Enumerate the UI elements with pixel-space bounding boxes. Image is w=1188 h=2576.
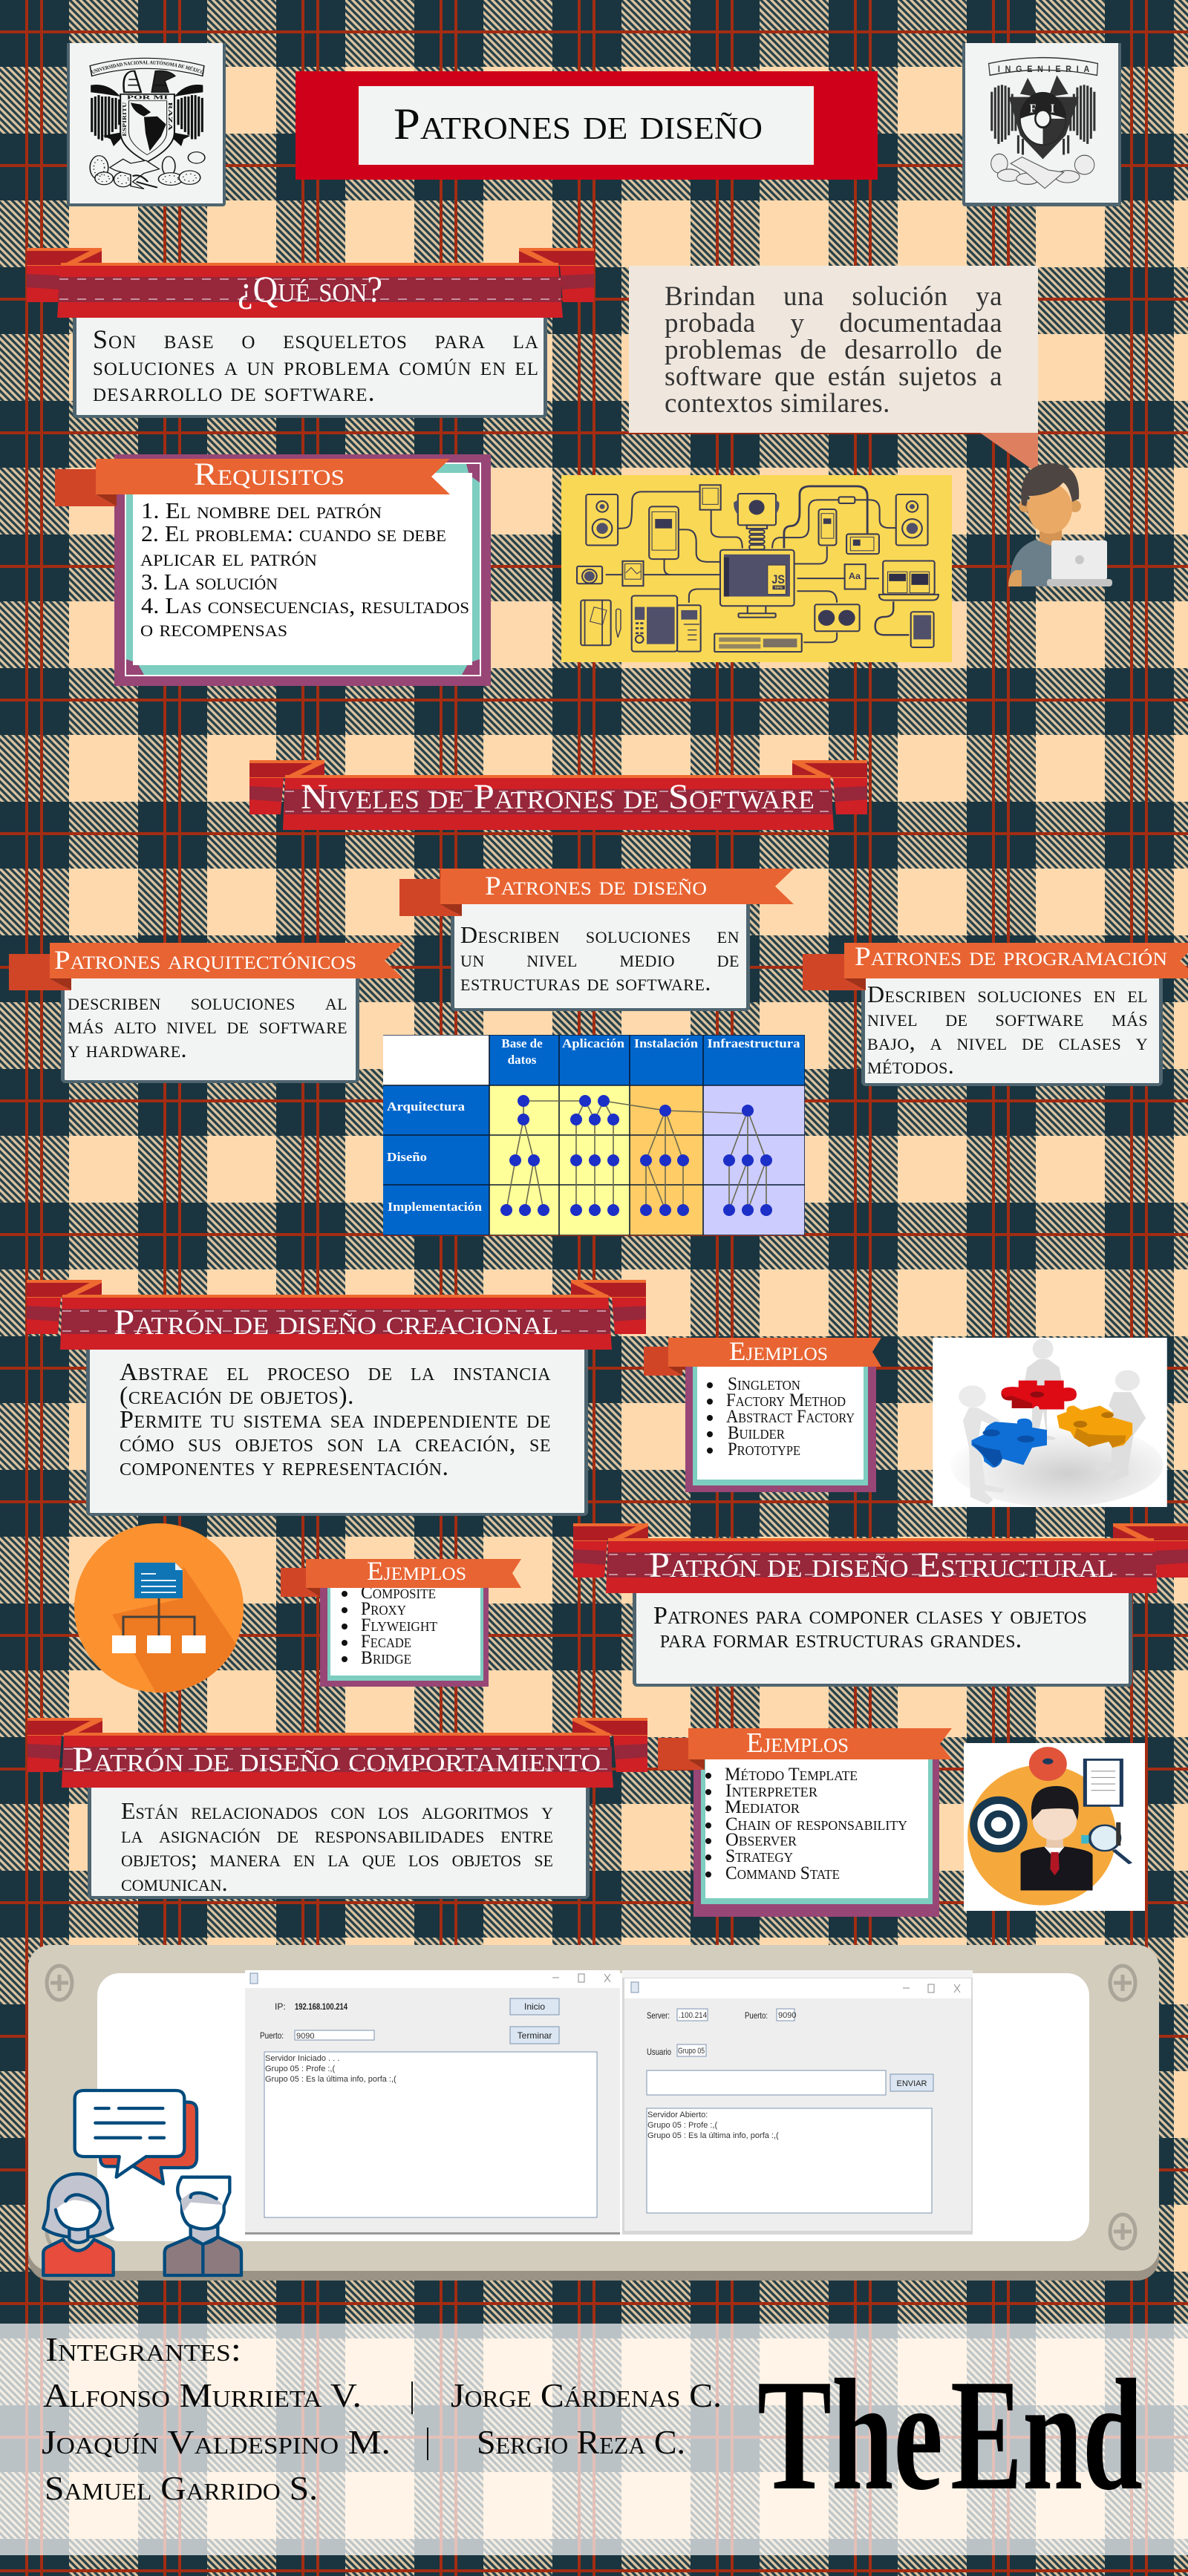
list: ejemplos estructurales: Fecade — [361, 1632, 411, 1652]
icon: orange circle with document hierarchy — [74, 1523, 244, 1693]
icon: person with laptop — [1008, 463, 1112, 586]
text: soluciones: contextos similares. — [665, 388, 890, 419]
table headers: Base de — [501, 1036, 543, 1050]
table: niveles por base de datos, aplicación, instalación, infraestructura — [383, 1035, 805, 1235]
screenshot: client window: Grupo 05 : Profe :,( — [647, 2121, 717, 2130]
table headers: datos — [508, 1053, 537, 1067]
image: Ingeniería logo card: I — [1051, 102, 1054, 116]
image: yellow connected devices illustration: TIPS — [774, 586, 782, 590]
text: soluciones — [665, 281, 1002, 419]
panel: patrones de programación — [861, 972, 1163, 1086]
list: ejemplos comportamiento — [705, 1765, 907, 1883]
list: ejemplos creacionales — [707, 1374, 855, 1459]
text: descripción comportamiento: comunican. — [121, 1869, 228, 1896]
panel: ejemplos creacional — [685, 1362, 876, 1492]
footer text: integrantes: Sergio Reza C. — [477, 2423, 685, 2461]
list text: requisitos — [140, 497, 469, 641]
image: Ingeniería logo card — [962, 43, 1121, 206]
title banner — [296, 71, 878, 180]
ribbon heading: niveles: Niveles de Patrones de Software — [301, 777, 815, 817]
image: UNAM logo card: UNIVERSIDAD NACIONAL AUTÓNOMA DE MÉXICO — [91, 60, 203, 74]
text: descripción estructural — [653, 1604, 1087, 1651]
image: UNAM logo card: ESPIRITU — [122, 102, 128, 137]
screenshot: server window: Grupo 05 : Es la última info, porfa :,( — [265, 2075, 396, 2084]
text: descripción programación — [867, 982, 1148, 1077]
panel: patrones de diseño — [451, 898, 750, 1011]
text: soluciones: Brindan una solución ya — [665, 281, 1002, 312]
footer text: integrantes: Joaquín Valdespino M. — [42, 2423, 391, 2461]
screenshot: client window: 9090 — [778, 2011, 796, 2020]
panel: requisitos — [114, 454, 491, 686]
table headers: Infraestructura — [707, 1036, 800, 1050]
list: ejemplos estructurales: Flyweight — [361, 1615, 437, 1635]
list: ejemplos estructurales: Composite — [361, 1583, 436, 1603]
ribbon heading: patrón creacional: Patrón de diseño creacional — [114, 1303, 558, 1342]
title plate — [359, 86, 814, 165]
ribbon: ejemplos comportamiento — [658, 1728, 952, 1770]
list text: requisitos: 1. El nombre del patrón — [141, 497, 382, 523]
footer text: integrantes: Samuel Garrido S. — [45, 2469, 318, 2507]
text: soluciones: problemas de desarrollo de — [665, 335, 1002, 365]
footer text: integrantes: Integrantes: — [45, 2330, 241, 2368]
ribbon heading: patrón comportamiento: Patrón de diseño comportamiento — [72, 1740, 601, 1779]
list text: requisitos: 3. La solución — [141, 569, 278, 595]
screenshot: server window: Puerto: — [260, 2030, 284, 2041]
screenshot: client window: Servidor Abierto: — [647, 2111, 708, 2119]
panel: ejemplos estructural — [320, 1583, 489, 1687]
text: descripción arquitectónicos: y hardware. — [68, 1036, 187, 1062]
table row labels: Diseño — [387, 1150, 427, 1164]
text: descripción diseño: estructuras de software. — [460, 969, 711, 996]
table row labels: Implementación — [388, 1200, 483, 1214]
screenshot: client window: Puerto: — [745, 2010, 768, 2021]
text: descripción arquitectónicos: más alto nivel de software — [68, 1012, 347, 1039]
panel: ejemplos comportamiento — [693, 1753, 939, 1917]
table headers — [501, 1036, 800, 1067]
panel: patrón creacional — [86, 1344, 588, 1516]
ribbon: ejemplos creacional — [644, 1338, 881, 1376]
image: yellow connected devices illustration: Aa — [848, 571, 861, 581]
ribbon: ejemplos estructural — [281, 1559, 521, 1597]
screenshot: server window: Terminar — [518, 2030, 552, 2041]
list: ejemplos comportamiento: Mediator — [725, 1797, 800, 1817]
screenshot: server window: Servidor Iniciado . . . — [265, 2054, 339, 2063]
image: businessman with target and clipboard — [964, 1743, 1145, 1911]
ribbon: ejemplos comportamiento: Ejemplos — [746, 1728, 849, 1759]
list text: requisitos: o recompensas — [140, 615, 287, 641]
screenshot: client window — [622, 1970, 973, 2235]
list: ejemplos estructurales: Bridge — [361, 1648, 411, 1668]
footer text: integrantes: Alfonso Murrieta V. — [43, 2376, 362, 2414]
list: ejemplos estructurales: Proxy — [361, 1599, 406, 1619]
text: descripción arquitectónicos: describen soluciones al — [68, 988, 347, 1015]
hierarchy node diagram — [500, 1095, 772, 1216]
board face — [28, 1945, 1159, 2271]
list: ejemplos creacionales: Factory Method — [726, 1390, 846, 1410]
screenshot: server window: Grupo 05 : Profe :,( — [265, 2065, 335, 2073]
text: descripción diseño: Describen soluciones en — [460, 921, 740, 948]
text: descripción arquitectónicos — [68, 990, 347, 1061]
ribbon: patrones de diseño — [399, 869, 794, 916]
ribbon heading: ¿Qué son?: ¿Qué son? — [238, 268, 382, 310]
list: ejemplos estructurales — [342, 1583, 437, 1668]
image: UNAM logo card: RAZA — [167, 102, 173, 131]
text: descripción comportamiento: objetos; manera en la que los objetos se — [121, 1845, 553, 1871]
screenshot: server window: 9090 — [296, 2032, 314, 2041]
ribbon heading: patrón comportamiento — [27, 1718, 647, 1788]
list text: requisitos: 2. El problema: cuando se debe — [141, 520, 446, 546]
text: descripción comportamiento — [121, 1799, 553, 1895]
text: soluciones: probada y documentadaa — [665, 308, 1002, 339]
panel: patrones arquitectónicos — [61, 972, 359, 1083]
list: ejemplos comportamiento: Interpreter — [725, 1781, 817, 1801]
text: definición: desarrollo de software. — [93, 377, 376, 407]
image: yellow connected devices illustration — [561, 475, 952, 662]
table headers: Instalación — [634, 1036, 699, 1050]
image: yellow connected devices illustration: JS — [771, 573, 784, 586]
panel: patrón estructural — [633, 1589, 1132, 1687]
screenshot: client window: .100.214 — [679, 2011, 707, 2020]
screenshot: client window: Grupo 05 — [678, 2047, 705, 2056]
screenshot: server window: 192.168.100.214 — [295, 2001, 347, 2012]
ribbon: requisitos — [55, 459, 450, 506]
ribbon heading: patrón creacional — [27, 1280, 646, 1350]
speech bubble: text callout — [629, 266, 1038, 469]
text: descripción creacional: Abstrae el proceso de la instancia Permite tu sistema sea independiente de — [120, 1359, 551, 1434]
footer text: integrantes — [0, 2324, 742, 2555]
table headers: Aplicación — [562, 1036, 625, 1050]
screenshot: server window: Inicio — [524, 2001, 545, 2012]
screenshot: server window: IP: — [275, 2001, 286, 2012]
text: descripción comportamiento: Están relacionados con los algoritmos y — [121, 1797, 553, 1824]
text: descripción comportamiento: la asignación de responsabilidades entre — [121, 1821, 553, 1848]
list: ejemplos creacionales: Prototype — [728, 1439, 800, 1459]
text: descripción diseño — [460, 923, 740, 994]
ribbon heading: ¿Qué son? — [27, 248, 594, 318]
ribbon: patrones arquitectónicos: Patrones arquitectónicos — [54, 945, 356, 975]
image: 3D figures with puzzle pieces — [933, 1338, 1167, 1507]
image: UNAM logo card — [67, 43, 226, 206]
text: descripción creacional — [120, 1361, 551, 1480]
panel: patrón comportamiento — [88, 1782, 590, 1899]
text: definición: soluciones a un problema común en el — [93, 350, 539, 380]
image: Ingeniería logo card: INGENIERIA — [998, 65, 1090, 74]
list: ejemplos comportamiento: Command State — [725, 1863, 840, 1883]
text: descripción programación: bajo, a nivel de clases y — [867, 1028, 1148, 1055]
screenshot: client window: Usuario — [647, 2047, 671, 2057]
ribbon: patrones de programación — [803, 943, 1188, 990]
list: ejemplos comportamiento: Observer — [725, 1830, 797, 1850]
text: descripción diseño: un nivel medio de — [460, 945, 740, 972]
footer text: integrantes: Jorge Cárdenas C. — [451, 2376, 722, 2414]
text: definición — [93, 324, 539, 407]
footer text: The End — [750, 2368, 1151, 2502]
table row labels — [387, 1099, 483, 1214]
text: descripción creacional: cómo sus objetos son la creación, se — [120, 1430, 551, 1457]
list: ejemplos creacionales: Abstract Factory — [726, 1407, 855, 1427]
panel: screenshots board — [28, 1945, 1159, 2281]
table row labels: Arquitectura — [387, 1099, 466, 1114]
text: descripción programación: nivel de software más — [867, 1004, 1148, 1031]
text: descripción programación: métodos. — [867, 1052, 954, 1079]
list: ejemplos comportamiento: Strategy — [725, 1846, 793, 1866]
text: soluciones: software que están sujetos a — [665, 362, 1002, 392]
list: ejemplos creacionales: Builder — [728, 1423, 785, 1443]
title plate: Patrones de diseño — [394, 99, 763, 148]
screenshot: client window: Grupo 05 : Es la última info, porfa :,( — [647, 2131, 779, 2140]
ribbon heading: niveles — [249, 760, 867, 830]
text: descripción programación: Describen soluciones en el — [867, 981, 1148, 1007]
image: Ingeniería logo card: F — [1030, 102, 1036, 116]
text: definición: Son base o esqueletos para la — [93, 324, 539, 354]
text: descripción estructural: para formar estructuras grandes. — [660, 1626, 1022, 1653]
list: ejemplos comportamiento: Chain of responsability — [725, 1814, 907, 1834]
text: descripción creacional: componentes y representación. — [120, 1454, 448, 1481]
image: UNAM logo card: POR MI — [127, 94, 169, 100]
list: ejemplos comportamiento: Método Template — [725, 1765, 858, 1785]
list text: requisitos: 4. Las consecuencias, resultados — [141, 592, 469, 618]
footer band: integrantes — [0, 2324, 1188, 2555]
screenshot: client window: ENVIAR — [897, 2079, 927, 2088]
screenshot: client window: Server: — [647, 2010, 670, 2021]
ribbon: patrones de diseño: Patrones de diseño — [485, 871, 707, 900]
text: descripción estructural: Patrones para componer clases y objetos — [653, 1602, 1087, 1629]
ribbon: patrones arquitectónicos — [9, 943, 403, 990]
ribbon heading: patrón estructural — [573, 1523, 1188, 1593]
text: descripción creacional: (creación de objetos). — [120, 1382, 354, 1410]
panel: qué son — [73, 312, 547, 418]
ribbon heading: patrón estructural: Patrón de diseño Estructural — [649, 1546, 1114, 1585]
screenshot: server window — [245, 1970, 620, 2235]
list text: requisitos: aplicar el patrón — [140, 545, 317, 571]
list: ejemplos creacionales: Singleton — [728, 1374, 800, 1394]
icon: two people talking with speech bubbles — [22, 2071, 260, 2286]
